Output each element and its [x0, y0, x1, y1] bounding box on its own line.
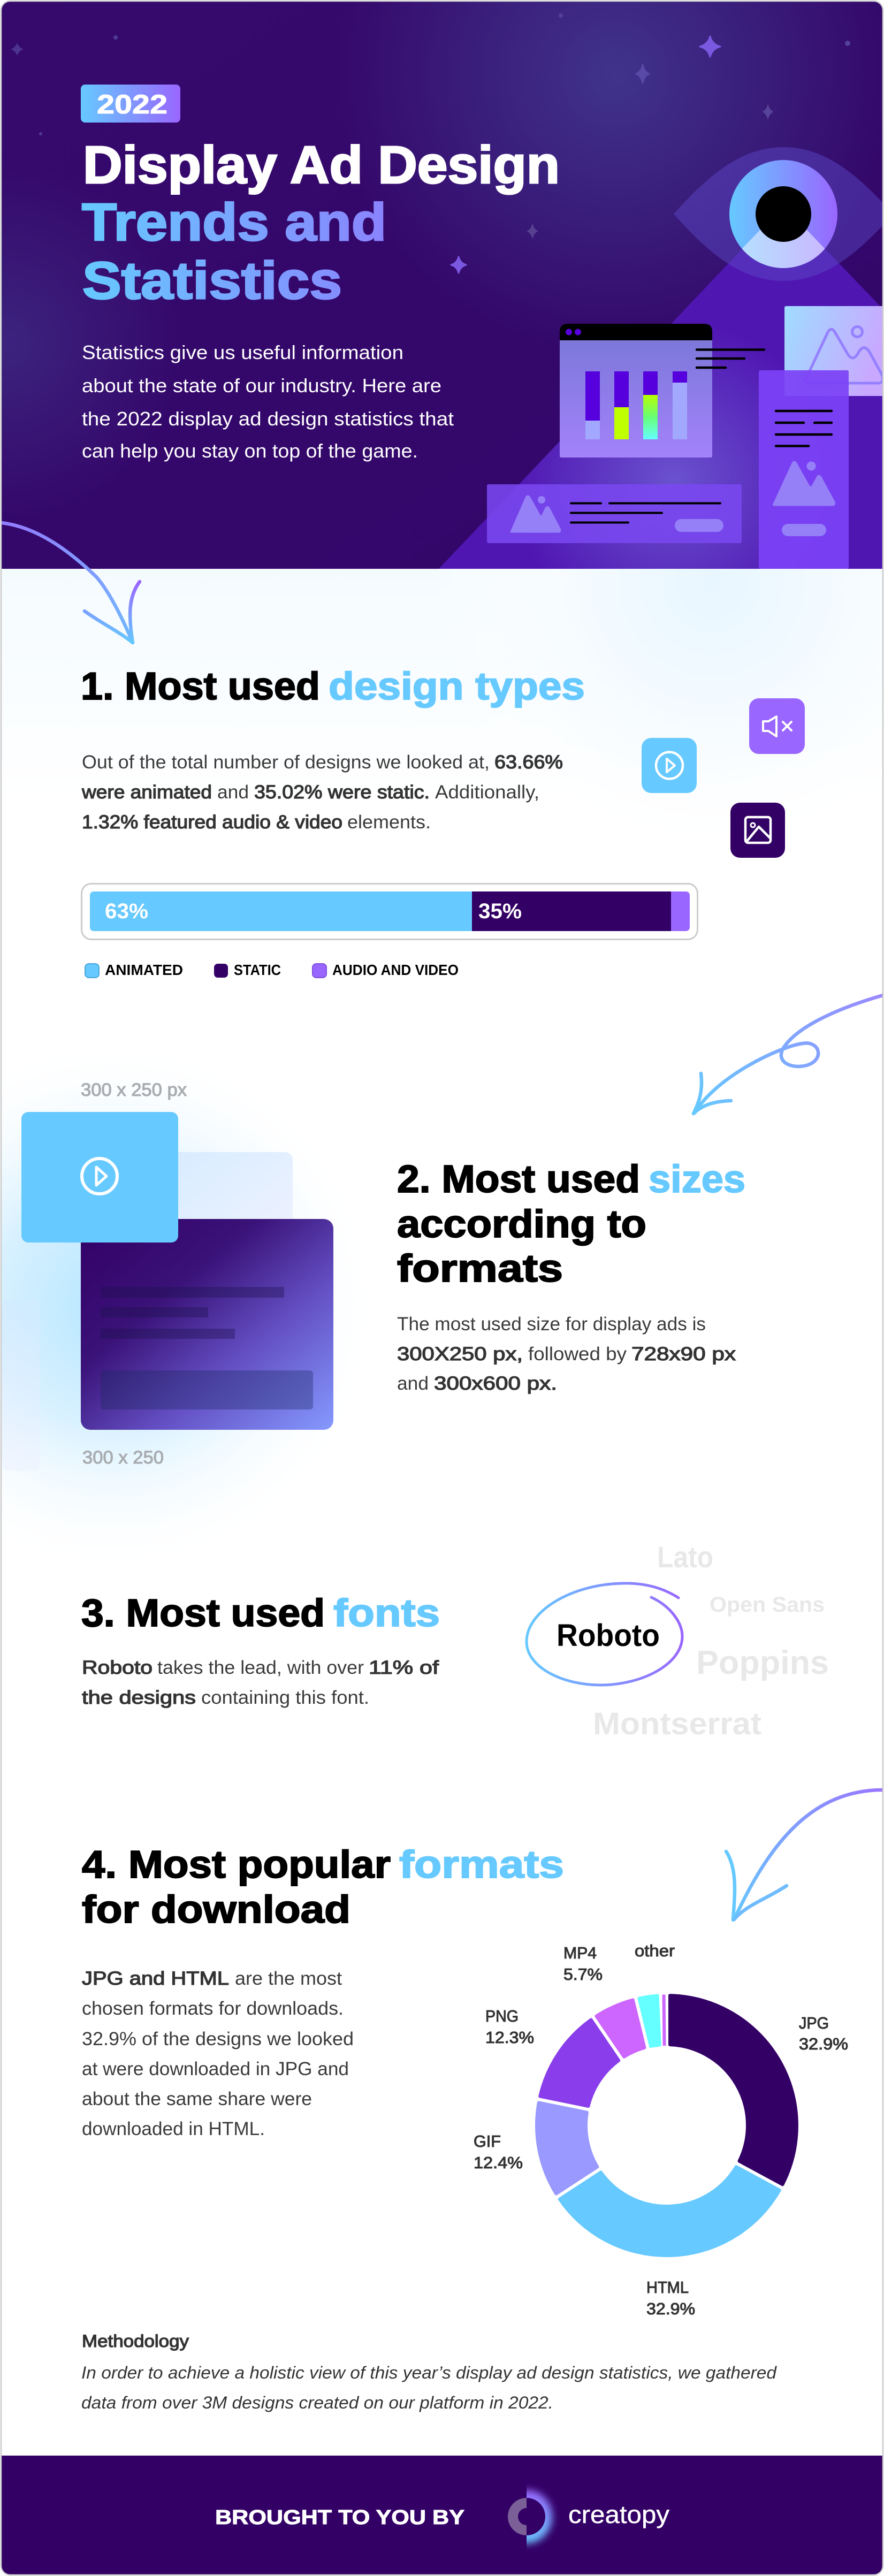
text: section 1 body: Additionally, — [435, 782, 539, 803]
intro text — [82, 341, 454, 462]
title: Statistics — [82, 251, 342, 310]
text: section 3 body: Roboto — [82, 1657, 153, 1678]
chart labels: 5.7% — [563, 1965, 603, 1984]
text: section 3 body — [82, 1657, 439, 1708]
graphic: font word cloud: Montserrat — [593, 1706, 761, 1741]
decoration: stars — [11, 13, 850, 273]
text: section 4 body: 32.9% of the designs we looked — [82, 2029, 354, 2049]
icon: muted speaker — [749, 698, 805, 754]
arrow: to section 4 chart — [726, 1790, 883, 1920]
segment: HTML — [560, 2167, 780, 2255]
text: methodology: data from over 3M designs created on our platform in 2022. — [81, 2393, 553, 2412]
heading: section 4: for download — [82, 1888, 350, 1931]
graphic: font word cloud: Poppins — [696, 1644, 829, 1681]
chart labels: MP4 — [563, 1944, 597, 1962]
hand-drawn circle with Roboto: Roboto — [557, 1618, 660, 1653]
text: section 1 body: 63.66% — [494, 752, 563, 773]
segment: MP4 — [596, 2000, 644, 2057]
text: section 2 body: followed by — [528, 1344, 627, 1365]
graphic: font word cloud — [527, 1540, 829, 1741]
chart labels — [474, 1941, 848, 2318]
chart labels: GIF — [474, 2132, 501, 2151]
text: section 3 body: the designs — [82, 1687, 196, 1708]
segment: other — [639, 1996, 660, 2046]
chart labels: other — [635, 1941, 675, 1960]
icon: eye — [674, 147, 882, 281]
segment: PNG — [540, 2019, 619, 2106]
segment: JPG — [670, 1995, 797, 2184]
text: section 4 body — [82, 1968, 354, 2139]
intro text: can help you stay on top of the game. — [82, 440, 418, 462]
logo: creatopy wordmark: creatopy — [568, 2501, 669, 2528]
heading: section 4: 4. Most popular — [82, 1843, 391, 1886]
text: section 1 body: were animated — [81, 782, 212, 803]
text: section 2 body: 300X250 px, — [397, 1344, 523, 1365]
graphic: font word cloud: Open Sans — [710, 1593, 825, 1617]
icon: play — [642, 738, 697, 793]
heading: section 1: 1. Most used — [81, 665, 320, 708]
blue video card with play icon — [21, 1112, 178, 1243]
text: section 1 body: 35.02% were static. — [254, 782, 430, 803]
arrow: to section 2 — [694, 995, 883, 1114]
heading: section 2: sizes — [649, 1158, 745, 1201]
chart labels: PNG — [485, 2007, 519, 2025]
heading: section 4: formats — [399, 1843, 564, 1886]
illustration: browser window with bars — [560, 324, 764, 458]
legend: ANIMATED — [105, 962, 183, 978]
chart labels: 32.9% — [646, 2299, 695, 2318]
text: section 3 body: containing this font. — [201, 1687, 369, 1708]
legend — [85, 962, 459, 978]
bar chart: design types share: 63% — [105, 900, 148, 923]
chart labels: 12.4% — [474, 2153, 523, 2172]
arrow: hero to section 1 — [2, 523, 140, 643]
heading: section 4 — [82, 1843, 564, 1931]
label: 300 x 250: 300 x 250 — [82, 1447, 164, 1468]
panel: design types section background — [2, 569, 882, 740]
segment: other sliver — [664, 1995, 665, 2046]
text: section 4 body: are the most — [235, 1968, 342, 1989]
heading: section 1: design types — [329, 665, 585, 708]
label: 300 x 250 px: 300 x 250 px — [81, 1080, 187, 1100]
text: section 1 body: Out of the total number of designs we looked at, — [82, 752, 490, 773]
segment: GIF — [537, 2102, 597, 2194]
text: section 1 body: elements. — [347, 812, 431, 833]
illustration: image card — [784, 306, 884, 396]
text: methodology — [81, 2331, 777, 2412]
heading: section 3: fonts — [333, 1592, 440, 1635]
badge: 2022 — [81, 85, 180, 123]
badge: 2022: 2022 — [97, 89, 167, 119]
text: section 4 body: downloaded in HTML. — [82, 2118, 265, 2139]
title: Display Ad Design — [83, 135, 560, 194]
chart labels: JPG — [799, 2014, 829, 2032]
panel: hero — [2, 2, 884, 569]
heading: section 2: 2. Most used — [397, 1158, 640, 1201]
text: section 4 body: chosen formats for downloads. — [82, 1998, 344, 2019]
donut chart: download formats — [537, 1995, 797, 2255]
dark ad card — [81, 1219, 333, 1430]
title: Trends and — [82, 193, 386, 251]
text: section 1 body: 1.32% featured audio & video — [82, 812, 342, 833]
heading: section 2: formats — [397, 1247, 563, 1290]
illustration: tall skyscraper ad — [759, 370, 849, 569]
title — [81, 144, 558, 300]
text: section 4 body: at were downloaded in JPG and — [82, 2059, 349, 2079]
text: section 4 body: about the same share were — [82, 2089, 312, 2109]
hand-drawn circle with Roboto — [527, 1583, 682, 1685]
text: section 2 body: 728x90 px — [631, 1344, 736, 1365]
logo: creatopy mark — [501, 2490, 552, 2543]
bar chart — [585, 371, 687, 439]
text: methodology: Methodology — [82, 2331, 189, 2351]
legend: AUDIO AND VIDEO — [332, 962, 459, 978]
heading: section 3 — [81, 1592, 440, 1635]
intro text: about the state of our industry. Here are — [82, 375, 441, 397]
text: section 2 body — [397, 1314, 736, 1394]
chart labels: 12.3% — [485, 2028, 534, 2047]
legend: STATIC — [234, 962, 281, 978]
heading: section 2: according to — [397, 1203, 646, 1246]
text: methodology: In order to achieve a holistic view of this year’s display ad design statistics, we gathered — [81, 2363, 777, 2382]
chart labels: HTML — [646, 2278, 689, 2297]
text: section 4 body: JPG and HTML — [82, 1968, 229, 1989]
illustration: banner ad — [487, 484, 742, 543]
bar chart: design types share: 35% — [478, 900, 522, 923]
heading: section 3: 3. Most used — [81, 1592, 325, 1635]
heading: section 2 — [397, 1158, 745, 1290]
text: section 1 body: and — [217, 782, 249, 803]
intro text: the 2022 display ad design statistics that — [82, 408, 454, 430]
text: section 3 body: takes the lead, with over — [157, 1657, 364, 1678]
chart labels: 32.9% — [799, 2034, 848, 2053]
panel: section 2 illustration — [2, 1038, 408, 1573]
intro text: Statistics give us useful information — [82, 341, 403, 363]
text: brought to you by: BROUGHT TO YOU BY — [215, 2506, 464, 2529]
graphic: font word cloud: Lato — [657, 1540, 713, 1574]
text: section 3 body: 11% of — [369, 1657, 439, 1678]
heading: section 1 — [82, 671, 584, 708]
text: section 1 body — [81, 752, 563, 833]
bar chart: design types share — [81, 884, 698, 940]
footer — [2, 2456, 882, 2574]
text: section 2 body: The most used size for display ads is — [397, 1314, 706, 1335]
text: section 2 body: and — [397, 1373, 429, 1394]
illustration: light beam — [439, 249, 882, 569]
icon: image — [730, 803, 785, 858]
text: section 2 body: 300x600 px. — [434, 1373, 557, 1394]
